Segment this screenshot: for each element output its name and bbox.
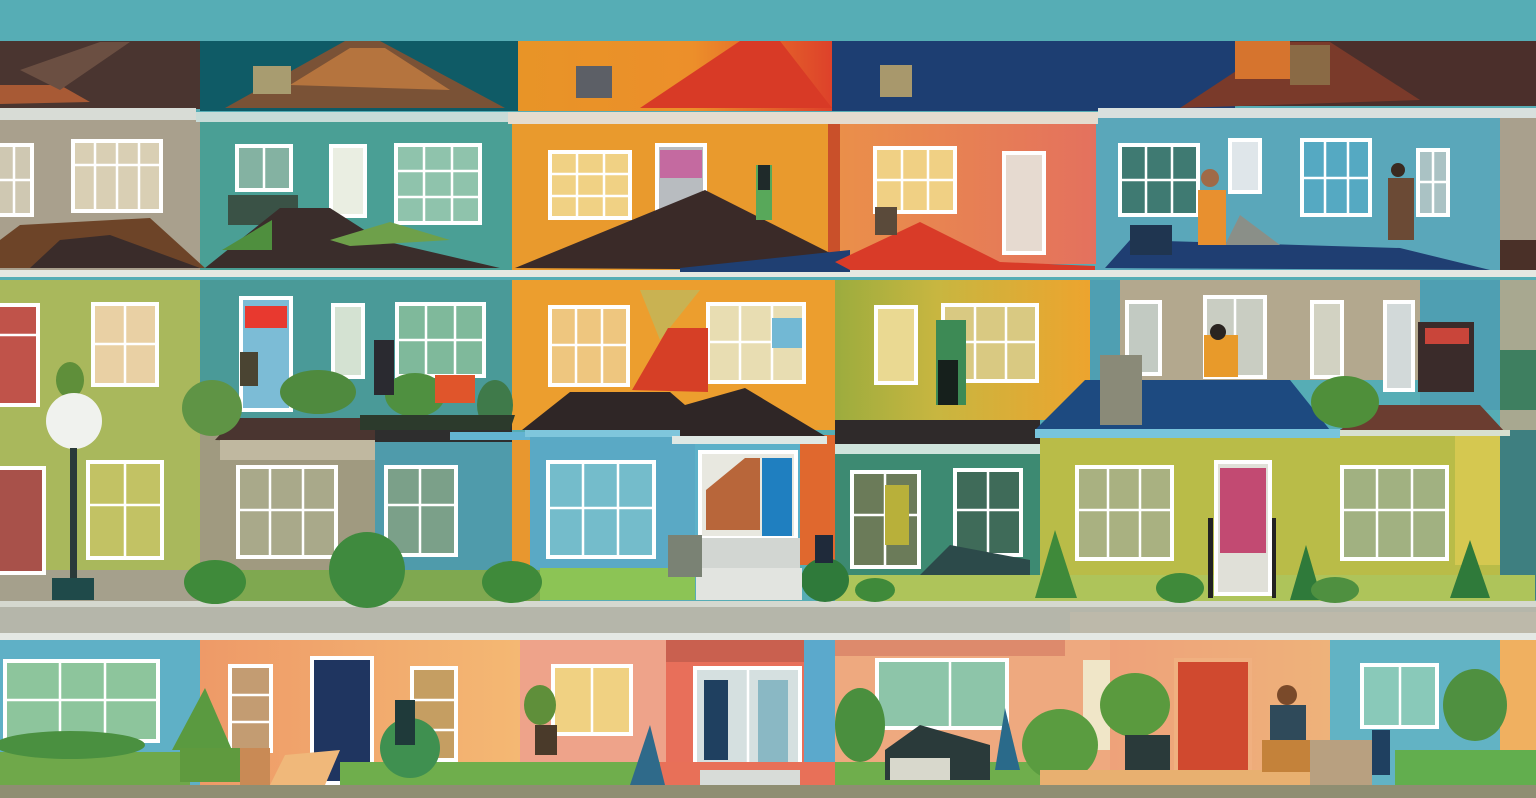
front bushes [184, 530, 1490, 608]
floor divider line 2 [0, 270, 1536, 277]
street lamp [46, 393, 102, 600]
ground lawn and plants [0, 669, 1536, 785]
lawn and street [0, 568, 1536, 640]
sidewalk bottom [0, 785, 1536, 798]
bushes and trees upper [56, 350, 1536, 436]
top sky band [0, 0, 1536, 41]
lower storey walls [200, 425, 1536, 600]
upper windows [0, 140, 1474, 410]
roof row [0, 41, 1536, 111]
upper storey walls [0, 118, 1536, 273]
upper roofs [0, 190, 1536, 272]
red house block in gable [632, 328, 708, 392]
ground floor windows and doors [5, 658, 1437, 783]
front steps [668, 535, 802, 600]
ground floor row walls [0, 640, 1536, 785]
people [240, 163, 1414, 563]
roof eaves line 1 [0, 108, 1536, 124]
lower roofs [215, 355, 1510, 460]
lower windows [0, 452, 1447, 598]
middle storey walls [0, 280, 1536, 600]
